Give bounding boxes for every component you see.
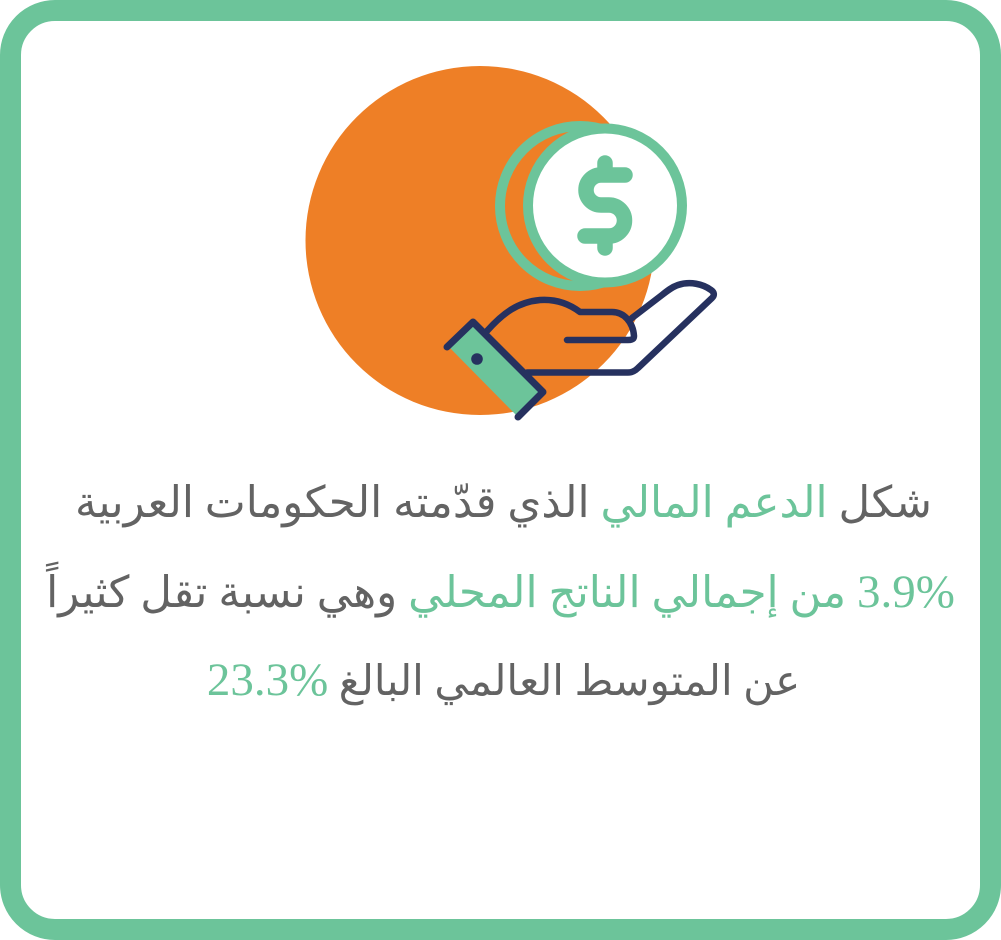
text block: description (46, 479, 955, 706)
text line 3: 23.3% (207, 654, 328, 706)
text line 1: شكل الدعم المالي الذي قدّمته الحكومات العربية (75, 479, 932, 527)
front coin (528, 128, 682, 282)
text line 3 (207, 654, 800, 706)
text line 2: 3.9% (857, 566, 955, 618)
text line 3: عن المتوسط العالمي البالغ (339, 659, 800, 705)
sleeve cuff (447, 322, 543, 417)
back coin (500, 126, 660, 286)
orange circle (306, 66, 654, 415)
hand outline (487, 283, 714, 372)
dollar sign (585, 163, 625, 248)
text line 2: من إجمالي الناتج المحلي وهي نسبة تقل كثيراً (46, 569, 846, 617)
